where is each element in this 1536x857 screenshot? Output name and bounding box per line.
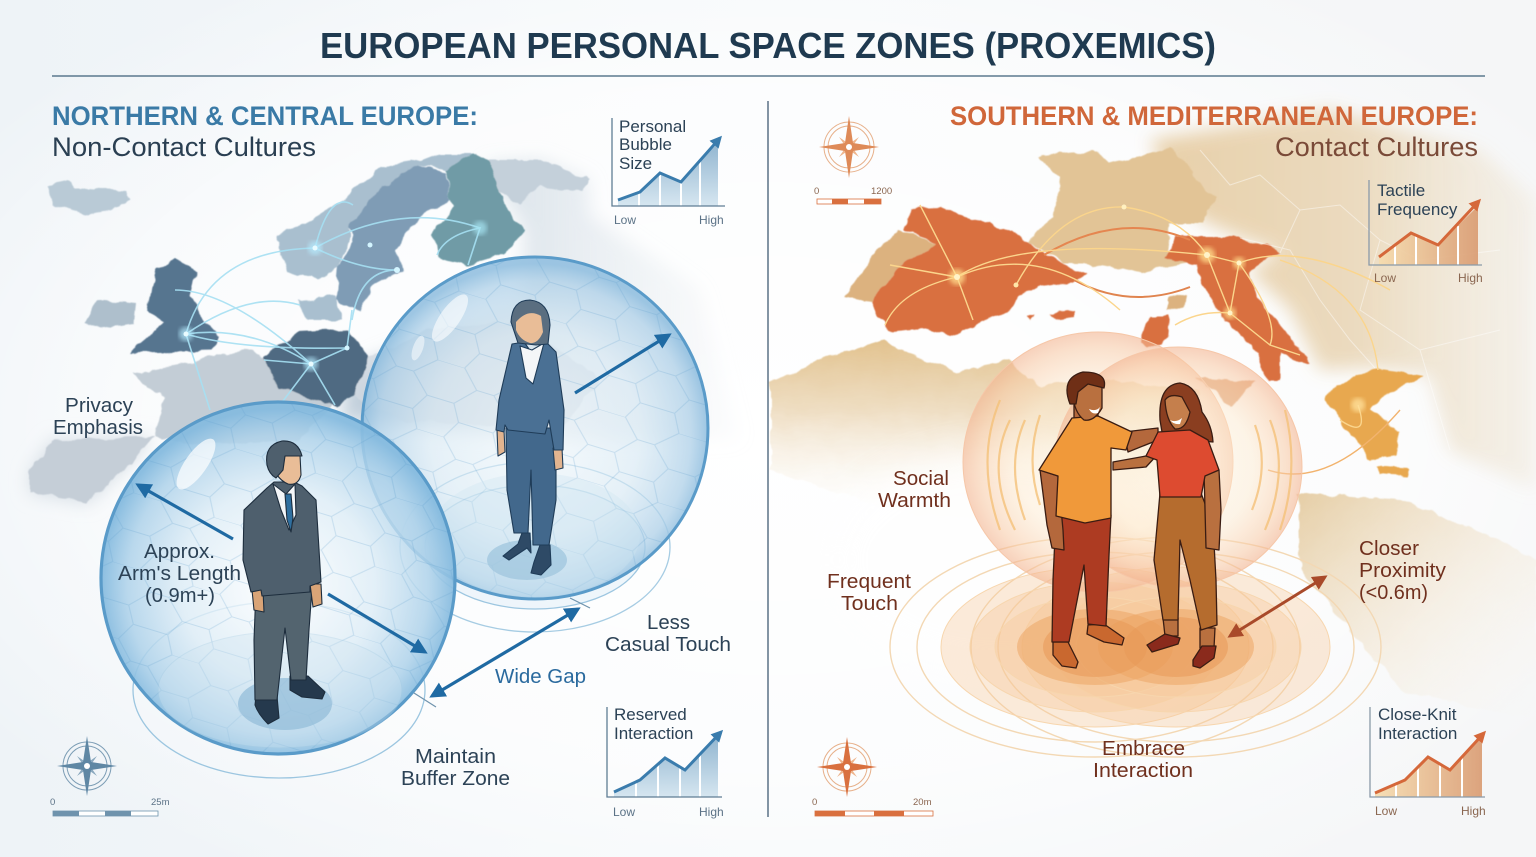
couple: woman shirt xyxy=(1146,430,1219,497)
label: frequent touch xyxy=(827,570,911,615)
map region: Denmark xyxy=(298,297,342,320)
warm glow behind couple xyxy=(830,450,1170,670)
map region: Corsica xyxy=(1170,292,1186,313)
map: North Africa xyxy=(770,340,1536,720)
compass: top right xyxy=(819,116,879,178)
scale bar: 20m: 20m xyxy=(913,797,932,808)
label: privacy emphasis: Privacy xyxy=(65,394,134,417)
map network lines: north xyxy=(175,202,480,410)
map region: Sicily xyxy=(1195,377,1258,405)
label: social warmth: Warmth xyxy=(878,489,951,512)
chart: tactile frequency xyxy=(1369,180,1483,285)
couple: man neck xyxy=(1074,405,1098,422)
chart: tactile frequency: Low xyxy=(1374,271,1396,285)
map: northern and central Europe xyxy=(30,153,600,503)
chart: personal bubble size: Size xyxy=(619,154,652,173)
label: embrace interaction: Interaction xyxy=(1093,759,1193,782)
label: arm's length xyxy=(118,540,241,607)
figure: businesswoman xyxy=(496,300,564,575)
couple: woman hair xyxy=(1160,383,1213,442)
couple: man shirt xyxy=(1039,416,1132,523)
man: shirt and tie xyxy=(273,484,296,530)
man: head xyxy=(271,447,301,484)
floor rings: woman bubble xyxy=(400,462,670,632)
label: maintain buffer zone xyxy=(401,745,510,790)
chart: tactile frequency: High xyxy=(1458,271,1483,285)
compass: bottom right xyxy=(817,737,877,797)
chart: tactile frequency: Frequency xyxy=(1377,200,1458,219)
couple: man arm over shoulder xyxy=(1124,428,1158,452)
map borders: white country lines xyxy=(1200,150,1500,450)
title: EUROPEAN PERSONAL SPACE ZONES (PROXEMICS) xyxy=(320,25,1216,66)
map region: Iberia xyxy=(30,437,155,503)
woman: blouse xyxy=(520,343,544,384)
heading: southern and Mediterranean Europe: Contact Cultures xyxy=(1275,132,1478,162)
label: embrace interaction: Embrace xyxy=(1102,737,1185,760)
map region: France xyxy=(1028,147,1216,273)
label: social warmth: Social xyxy=(893,467,949,490)
figure: man in orange shirt xyxy=(1039,372,1158,668)
scale bar: 1200: 1200 xyxy=(871,186,892,197)
couple: man head xyxy=(1073,380,1102,420)
man: jacket xyxy=(243,482,321,596)
heading: southern and Mediterranean Europe: SOUTHERN & MEDITERRANEAN EUROPE: xyxy=(950,101,1478,131)
label: embrace interaction xyxy=(1093,737,1193,782)
scale bar: 1200 xyxy=(814,186,892,204)
arrow: closer proximity xyxy=(1230,577,1325,636)
chart: close-knit interaction: Interaction xyxy=(1378,724,1457,743)
chart: personal bubble size: Personal xyxy=(619,117,686,136)
arrow: wide gap xyxy=(432,609,578,696)
scale bar: 1200: 0 xyxy=(814,186,819,197)
label: closer proximity: Proximity xyxy=(1359,559,1447,582)
bubble: woman xyxy=(362,257,708,599)
map region: Portugal xyxy=(844,228,936,302)
map network lines: south xyxy=(885,205,1400,474)
label: arm's length: (0.9m+) xyxy=(145,584,215,607)
label: arm's length: Arm's Length xyxy=(118,562,241,585)
chart: close-knit interaction: Close-Knit xyxy=(1378,705,1457,724)
couple: woman calves and shoes xyxy=(1163,618,1215,648)
map region: Kola xyxy=(486,160,589,205)
map region: Iceland xyxy=(49,180,131,215)
map region: Poland and east-central Europe xyxy=(354,320,600,430)
man: hands xyxy=(252,584,322,612)
couple: woman trousers xyxy=(1154,493,1217,630)
couple: woman face xyxy=(1165,396,1190,429)
floor rings: man bubble xyxy=(133,602,425,778)
label: less casual touch: Less xyxy=(647,611,690,634)
chart: personal bubble size xyxy=(612,117,725,227)
map region: Greece xyxy=(1325,368,1425,477)
map region: Italy xyxy=(1163,235,1310,380)
label: maintain buffer zone: Buffer Zone xyxy=(401,767,510,790)
chart: personal bubble size: High xyxy=(699,213,724,227)
labels: southern panel xyxy=(827,467,1447,782)
heading: southern and Mediterranean Europe xyxy=(950,101,1478,162)
chart: reserved interaction: Interaction xyxy=(614,724,693,743)
chart: close-knit interaction: High xyxy=(1461,804,1486,818)
map: southern and Mediterranean Europe xyxy=(844,147,1425,477)
label: privacy emphasis xyxy=(53,394,143,439)
couple: man shoes xyxy=(1053,624,1124,668)
chart: reserved interaction: High xyxy=(699,805,724,819)
label: wide gap: Wide Gap xyxy=(495,665,586,688)
woman: hair and face xyxy=(511,300,550,345)
label: frequent touch: Frequent xyxy=(827,570,911,593)
woman: trousers xyxy=(506,428,556,545)
map region: Sweden xyxy=(335,165,451,313)
arrow: man bubble left xyxy=(138,485,233,539)
woman: jacket xyxy=(496,342,564,450)
map: soft land wash, south-east xyxy=(1150,110,1536,490)
map network nodes: north xyxy=(179,221,487,371)
chart: tactile frequency: Tactile xyxy=(1377,181,1425,200)
couple: woman arms xyxy=(1204,470,1221,550)
heading: northern and central Europe: Non-Contact Cultures xyxy=(52,132,316,162)
scale bar: 20m xyxy=(812,797,933,816)
warmth zones: spheres xyxy=(963,332,1302,592)
chart: personal bubble size: Low xyxy=(614,213,636,227)
map region: Sardinia xyxy=(1140,317,1172,348)
map region: United Kingdom xyxy=(129,258,219,353)
figure: woman in red shirt xyxy=(1113,383,1221,668)
scale bar: 25m xyxy=(50,797,170,816)
chart: reserved interaction xyxy=(607,705,724,819)
map region: France and Benelux xyxy=(130,350,334,445)
map region: Germany xyxy=(264,330,367,407)
chart: reserved interaction: Low xyxy=(613,805,635,819)
chart: personal bubble size: Bubble xyxy=(619,135,672,154)
label: closer proximity: Closer xyxy=(1359,537,1419,560)
figure: businessman xyxy=(243,441,325,724)
man: trousers xyxy=(254,588,312,700)
warmth zones: floor ripples xyxy=(890,537,1381,757)
label: maintain buffer zone: Maintain xyxy=(415,745,496,768)
label: arm's length: Approx. xyxy=(144,540,215,563)
label: frequent touch: Touch xyxy=(841,592,898,615)
couple: man trousers xyxy=(1052,515,1111,642)
map network nodes: south xyxy=(949,204,1365,412)
map region: Norway xyxy=(277,153,473,280)
man: shoes xyxy=(255,676,325,724)
map region: Spain xyxy=(870,207,1088,335)
labels: northern panel xyxy=(53,394,731,790)
compass: bottom left xyxy=(57,736,117,796)
chart: close-knit interaction: Low xyxy=(1375,804,1397,818)
label: social warmth xyxy=(878,467,951,512)
label: privacy emphasis: Emphasis xyxy=(53,416,143,439)
woman: hands xyxy=(497,430,563,470)
chart: close-knit interaction xyxy=(1370,705,1486,818)
heading: northern and central Europe: NORTHERN & CENTRAL EUROPE: xyxy=(52,101,478,131)
scale bar: 20m: 0 xyxy=(812,797,817,808)
couple: man left arm and hand xyxy=(1040,470,1064,550)
woman: shoes xyxy=(503,533,551,575)
arrows: bubble radius and wide gap xyxy=(138,335,669,707)
map region: Ireland xyxy=(85,300,136,328)
scale bar: 25m: 0 xyxy=(50,797,55,808)
map: soft grey land wash, north xyxy=(30,160,740,503)
arrow: woman bubble xyxy=(575,335,669,393)
label: closer proximity xyxy=(1359,537,1447,604)
arrow: man bubble right xyxy=(328,594,425,652)
scale bar: 25m: 25m xyxy=(151,797,170,808)
chart: reserved interaction: Reserved xyxy=(614,705,687,724)
map region: Finland xyxy=(433,153,524,265)
label: closer proximity: (<0.6m) xyxy=(1359,581,1428,604)
bubble: man xyxy=(101,402,455,754)
label: less casual touch xyxy=(605,611,731,656)
heading: northern and central Europe xyxy=(52,101,478,162)
label: less casual touch: Casual Touch xyxy=(605,633,731,656)
map region: Balearic islands xyxy=(1026,310,1074,322)
